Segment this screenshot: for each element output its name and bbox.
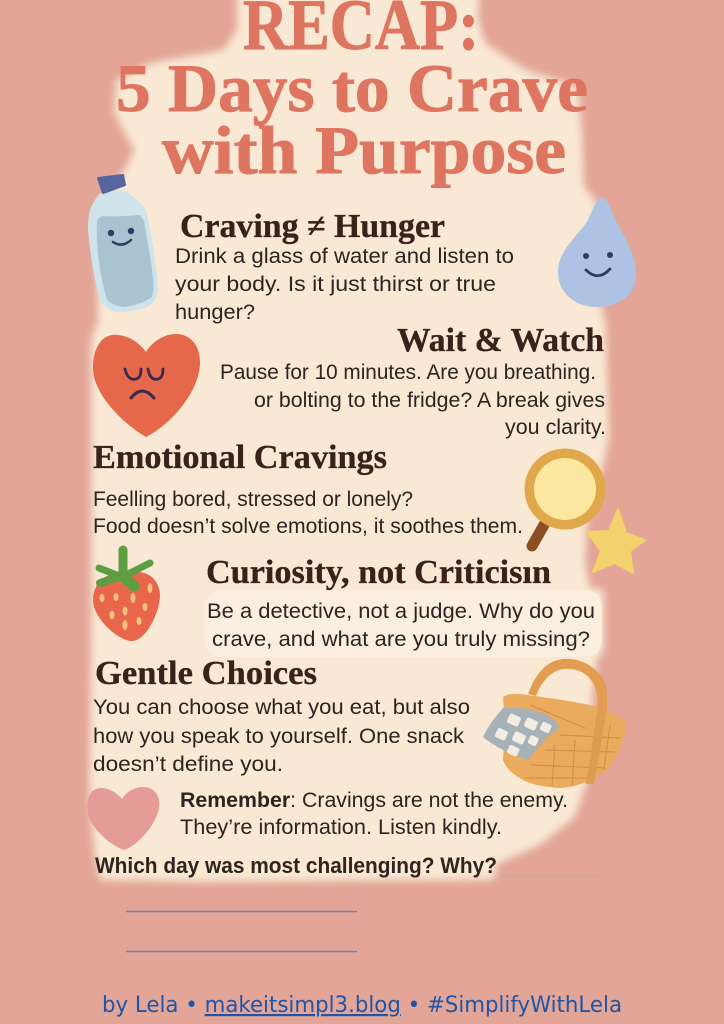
text: gentle choices: how you speak to yourself. One snack [93,725,465,748]
icon: water bottle [88,175,158,312]
text: wait and watch: or bolting to the fridge? A break gives [254,389,605,412]
question: Which day was most challenging? Why? [95,853,497,878]
text: emotional cravings: Feelling bored, stressed or lonely? [93,488,413,511]
answer lines [126,876,598,952]
title: with Purpose [162,112,566,188]
text: craving: your body. Is it just thirst or true [175,273,496,296]
title: 5 Days to Crave [116,50,588,126]
callout background [204,590,602,657]
heading: craving not hunger: Craving ≠ Hunger [180,208,445,245]
icon: strawberry [93,550,160,641]
text: gentle choices: You can choose what you eat, but also [93,696,470,719]
text: gentle choices: doesn’t define you. [93,753,283,776]
icon: water drop [558,198,636,307]
text: wait and watch: Pause for 10 minutes. Are you breathing. [220,361,596,384]
text: wait and watch: you clarity. [505,416,606,439]
cream paper blob [89,0,609,882]
text: emotional cravings [93,488,523,538]
heading: curiosity: Curiosity, not Criticisın [206,554,551,591]
text: remember [180,789,568,839]
text: curiosity: Be a detective, not a judge. Why do you [207,600,595,623]
text: craving [175,245,514,324]
text: curiosity [207,600,595,651]
icon: sad heart [93,334,200,437]
text: remember: Remember: Cravings are not the enemy. [180,789,568,812]
text: wait and watch [220,361,606,439]
text: gentle choices [93,696,470,776]
icon: picnic basket [483,659,626,788]
heading: emotional cravings: Emotional Cravings [93,439,387,476]
text: emotional cravings: Food doesn’t solve emotions, it soothes them. [93,515,523,538]
heading: gentle choices: Gentle Choices [95,655,317,692]
title [116,0,588,188]
text: craving: Drink a glass of water and listen to [175,245,514,268]
icon: pink heart [87,787,159,850]
footer: by Lela • makeitsimpl3.blog • #SimplifyWithLela [102,993,622,1018]
heading: wait and watch: Wait & Watch [397,322,604,359]
icon: magnifying glass [524,448,606,546]
text: remember: They’re information. Listen kindly. [180,816,502,839]
text: curiosity: crave, and what are you truly missing? [212,628,590,651]
text: craving: hunger? [175,301,255,324]
icon: star [587,509,645,573]
